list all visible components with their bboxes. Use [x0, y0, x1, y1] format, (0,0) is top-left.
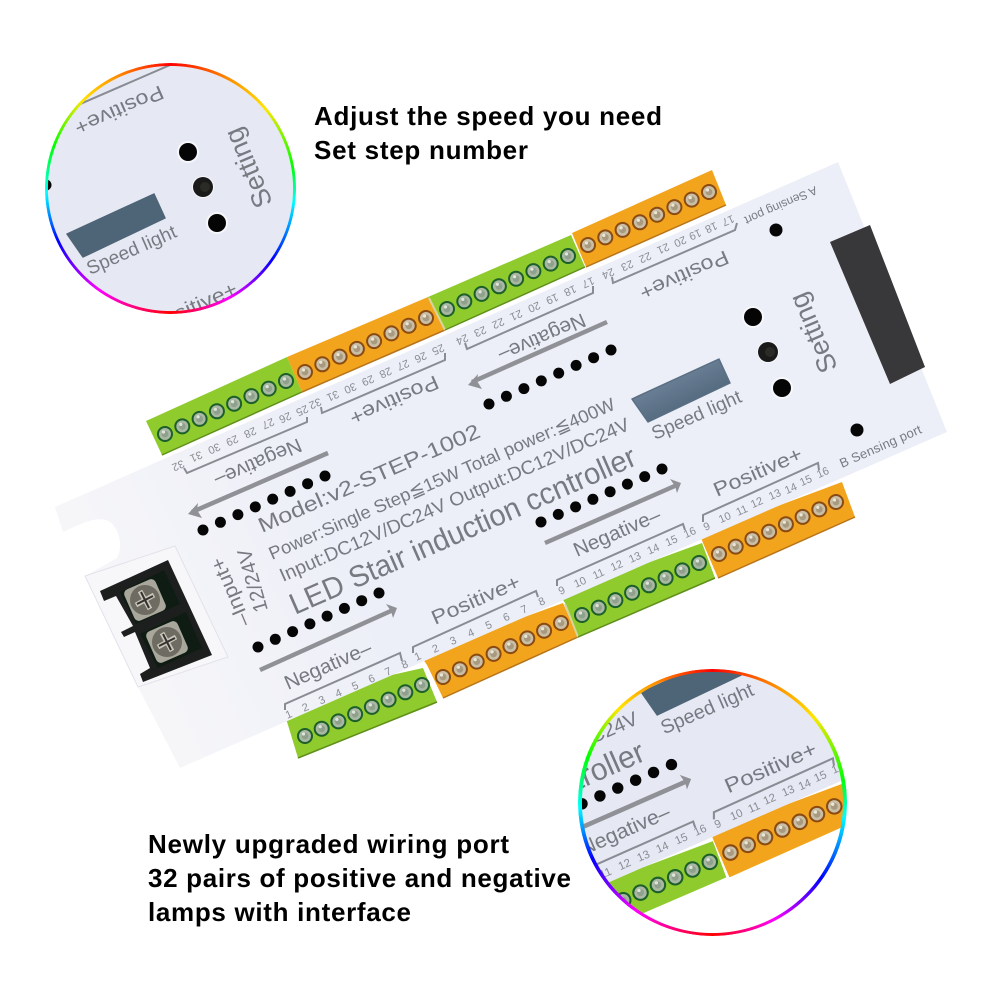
arrow: bottom right	[545, 479, 681, 543]
heading: adjust speed	[314, 101, 662, 165]
heading: adjust speed: Adjust the speed you need	[314, 101, 662, 131]
numbers 32-25 negative: 32	[170, 457, 186, 473]
arrow: bottom left	[260, 604, 397, 670]
heading: wiring port	[148, 829, 571, 927]
controller board	[55, 162, 947, 768]
inset label: Setting: Setting	[218, 123, 279, 212]
label: A Sensing port: A Sensing port	[742, 183, 819, 228]
inset numbers: 14	[797, 777, 813, 793]
numbers 9-16 positive: 16	[815, 465, 831, 481]
label: Model: Model:v2-STEP-1002	[255, 420, 484, 538]
inset bracket	[81, 66, 170, 105]
numbers 9-16 negative: 15	[664, 533, 680, 549]
numbers 24-17 positive: 17	[720, 212, 736, 228]
numbers 24-17 negative: 21	[508, 307, 524, 323]
arrow: top right	[468, 322, 607, 389]
terminal block: top green 25-32	[146, 357, 302, 455]
numbers 32-25 positive: 30	[342, 380, 358, 396]
terminal connector	[100, 560, 212, 682]
numbers 24-17 positive	[600, 212, 736, 281]
heading: wiring port: lamps with interface	[148, 897, 411, 927]
brackets	[184, 223, 819, 710]
numbers 9-16 negative: 9	[557, 584, 567, 598]
numbers 24-17 positive: 22	[637, 249, 653, 265]
inset numbers: 12	[762, 792, 778, 808]
indicator dots: top left	[198, 470, 330, 536]
numbers 9-16 positive: 10	[717, 510, 733, 526]
inset label: Positive top: Positive+	[71, 80, 167, 139]
numbers 1-8 negative: 6	[367, 673, 377, 686]
numbers 24-17 positive: 18	[703, 219, 719, 235]
numbers 24-17 positive: 21	[655, 240, 671, 256]
numbers 1-8 positive: 7	[519, 603, 530, 617]
raised terminal frame	[85, 546, 228, 687]
indicator dots: top right	[484, 344, 616, 410]
numbers 24-17 negative: 17	[580, 274, 596, 290]
inset dots	[582, 758, 678, 810]
numbers 9-16 positive: 13	[767, 487, 783, 503]
numbers 9-16 positive: 11	[734, 503, 750, 519]
inset label: controller: LED Stair induction ccntroller	[280, 734, 650, 922]
numbers 1-8 negative: 5	[350, 680, 361, 693]
numbers 32-25 positive: 29	[360, 372, 376, 388]
numbers 1-8 positive: 4	[466, 627, 476, 640]
inset numbers: 15	[673, 831, 690, 847]
numbers 1-8 negative: 2	[300, 701, 311, 715]
label: LED Stair induction ccntroller: LED Stair induction ccntroller	[285, 440, 641, 621]
terminal block: bottom orange 1-8	[420, 603, 578, 698]
numbers 32-25 negative: 26	[277, 409, 293, 425]
heading: adjust speed: Set step number	[314, 135, 528, 165]
numbers 9-16 negative: 10	[572, 575, 588, 591]
numbers 9-16 positive: 12	[749, 495, 765, 511]
inset numbers	[601, 765, 839, 877]
numbers 32-25 negative: 31	[188, 448, 204, 464]
speed light window	[632, 359, 730, 422]
inset numbers: 11	[746, 800, 762, 816]
label: Positive top left: Positive+	[346, 370, 442, 429]
numbers 9-16 negative: 16	[682, 525, 698, 541]
numbers 9-16 negative	[557, 525, 698, 598]
label: Negative top right: Negative–	[494, 308, 589, 366]
inset label: Positive: Positive+	[721, 738, 820, 798]
label: Input Output: Input:DC12V/DC24V Output:DC12V/DC24V	[277, 414, 633, 587]
terminal block: top green 17-24	[428, 235, 585, 330]
numbers 9-16 negative: 11	[591, 567, 606, 582]
inset board	[582, 676, 842, 882]
numbers 9-16 negative: 12	[609, 558, 625, 574]
numbers 1-8 negative: 3	[317, 694, 327, 707]
sensing port holes	[770, 224, 864, 436]
inset numbers: 16	[830, 761, 846, 777]
inset numbers: 10	[728, 807, 745, 823]
numbers 9-16 negative: 14	[645, 542, 661, 558]
numbers 24-17 negative: 20	[526, 298, 542, 314]
numbers 1-8 positive: 5	[484, 619, 494, 632]
numbers 1-8 negative: 4	[333, 687, 344, 700]
numbers 24-17 positive: 23	[619, 257, 635, 273]
numbers 32-25 negative: 25	[294, 402, 310, 418]
numbers 1-8 positive: 8	[537, 595, 547, 609]
inset numbers: 10	[579, 874, 595, 890]
detail inset: setting and speed light	[48, 66, 293, 311]
numbers 32-25 positive: 32	[307, 395, 323, 411]
numbers 32-25 positive	[307, 341, 446, 411]
inset speed light window	[641, 672, 742, 716]
label: Positive bottom left: Positive+	[428, 571, 524, 630]
label: 12/24V: 12/24V	[234, 545, 273, 615]
numbers 32-25 negative: 27	[260, 415, 276, 431]
numbers 32-25 negative	[170, 402, 310, 473]
inset label: Negative: Negative–	[576, 800, 674, 860]
inset terminal blocks	[609, 784, 844, 914]
rainbow ring: top inset	[45, 63, 296, 314]
inset numbers: 13	[635, 849, 652, 865]
board body	[55, 162, 947, 768]
inset label: input: Input:DC12V/DC24V Output:DC12V/DC24V	[272, 708, 642, 886]
numbers 9-16 positive: 9	[702, 520, 712, 534]
terminal block: bottom green 1-8	[280, 668, 437, 758]
numbers 24-17 negative: 24	[454, 331, 470, 347]
numbers 9-16 positive: 14	[783, 481, 799, 497]
inset numbers: 14	[654, 840, 671, 856]
terminal block: bottom orange 9-16	[700, 482, 855, 578]
terminal block: top orange 25-32	[287, 297, 445, 392]
label: -Input+: –Input+	[207, 554, 256, 630]
numbers 32-25 negative: 28	[242, 424, 258, 440]
inset speed light window	[67, 194, 165, 257]
inset numbers: 13	[780, 783, 797, 800]
numbers 1-8 negative	[284, 658, 410, 722]
numbers 1-8 positive: 1	[413, 650, 423, 664]
numbers 24-17 positive: 19	[687, 226, 703, 242]
inset label: Positive bottom: Positive+	[145, 278, 241, 337]
numbers 24-17 negative: 18	[562, 282, 578, 298]
label: Negative bottom left: Negative–	[281, 637, 376, 695]
numbers 32-25 positive: 27	[395, 356, 411, 372]
inset numbers: 11	[598, 866, 614, 882]
numbers 32-25 positive: 25	[430, 341, 446, 357]
inset brackets	[596, 757, 835, 865]
terminal block: bottom green 9-16	[560, 543, 715, 637]
label: Positive bottom right: Positive+	[710, 443, 806, 502]
numbers 24-17 positive: 20	[672, 233, 688, 249]
numbers 32-25 positive: 31	[325, 387, 341, 403]
inset numbers: 16	[692, 823, 709, 839]
inset numbers: 9	[713, 818, 723, 831]
numbers 24-17 negative: 23	[472, 323, 488, 339]
numbers 1-8 positive: 2	[430, 642, 441, 656]
terminal block: top orange 17-24	[572, 170, 726, 267]
numbers 9-16 positive	[702, 465, 831, 534]
setting buttons	[742, 306, 793, 399]
numbers 1-8 positive: 6	[501, 611, 512, 624]
label: Power: Power:Single Step≦15W Total power:≦400W	[266, 394, 618, 564]
numbers 32-25 positive: 26	[412, 349, 428, 365]
label: Positive top right: Positive+	[636, 245, 732, 304]
inset numbers: 12	[617, 857, 633, 873]
heading: wiring port: Newly upgraded wiring port	[148, 829, 509, 859]
numbers 9-16 positive: 15	[798, 473, 814, 489]
inset edge dot	[48, 180, 52, 190]
rainbow ring: bottom inset	[578, 669, 847, 936]
label: Speed light: Speed light	[649, 386, 746, 445]
foam sensor pad	[830, 225, 925, 384]
numbers 1-8 positive: 3	[448, 635, 459, 648]
label: B Sensing port: B Sensing port	[837, 421, 924, 471]
label: Negative bottom right: Negative–	[570, 504, 665, 562]
numbers 1-8 negative: 7	[383, 665, 394, 679]
numbers 1-8 positive	[413, 595, 547, 664]
detail inset: wiring ports	[582, 672, 844, 914]
indicator dots: bottom right	[536, 464, 668, 528]
numbers 1-8 negative: 1	[284, 708, 294, 722]
numbers 1-8 negative: 8	[400, 658, 410, 672]
numbers 32-25 negative: 30	[206, 440, 222, 456]
inset arrow	[584, 775, 691, 828]
numbers 32-25 positive: 28	[377, 364, 393, 380]
numbers 24-17 negative: 22	[490, 315, 506, 331]
inset label: Speed light: Speed light	[84, 221, 181, 280]
label: Negative top left: Negative–	[210, 433, 305, 491]
indicator dots: bottom left	[252, 588, 384, 652]
inset buttons	[177, 141, 228, 234]
numbers 24-17 negative: 19	[544, 290, 560, 306]
arrow: top left	[188, 453, 328, 518]
numbers 32-25 negative: 29	[224, 432, 240, 448]
label: Setting: Setting	[783, 288, 844, 377]
numbers 24-17 positive: 24	[600, 265, 616, 281]
numbers 9-16 negative: 13	[627, 550, 643, 566]
inset label: Speed light: Speed light	[657, 679, 758, 739]
numbers 24-17 negative	[454, 274, 596, 347]
inset numbers: 15	[812, 769, 829, 785]
heading: wiring port: 32 pairs of positive and negative	[148, 863, 571, 893]
